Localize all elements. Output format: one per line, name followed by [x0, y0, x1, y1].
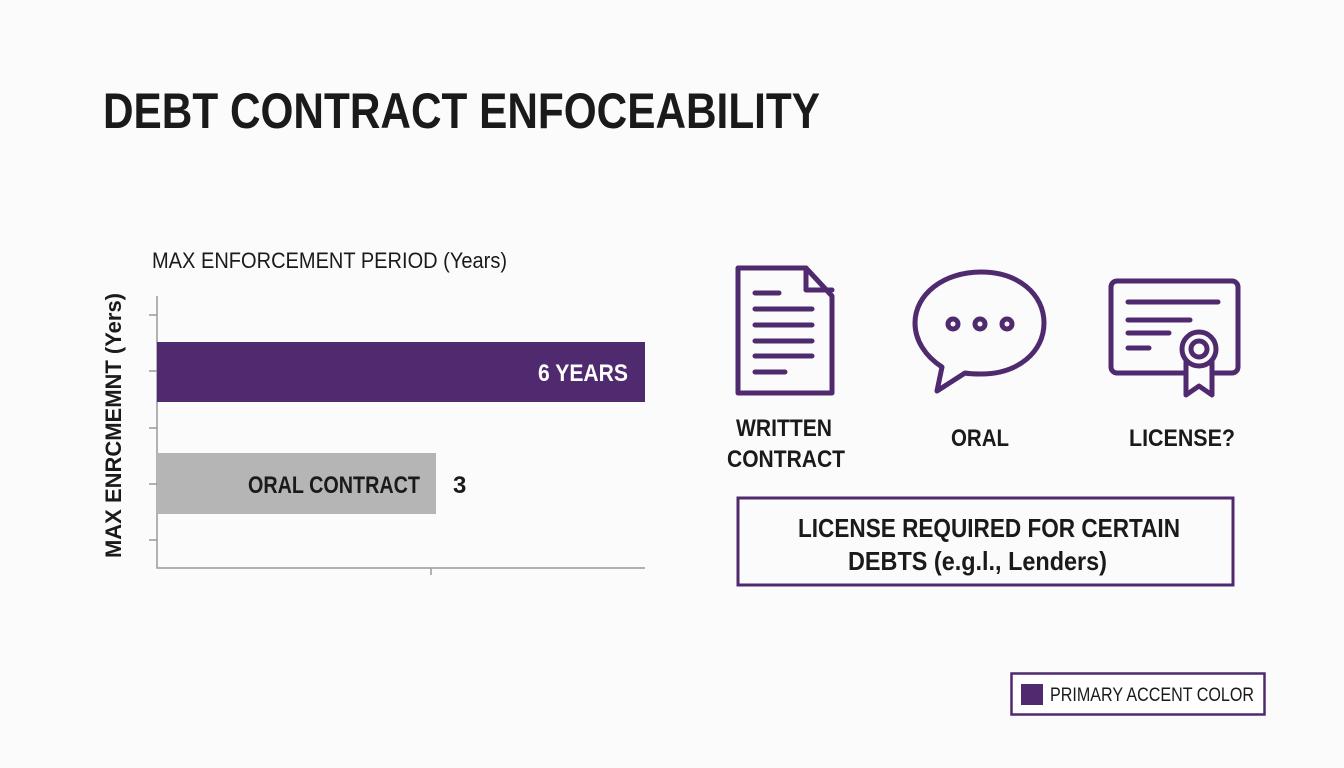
legend: PRIMARY ACCENT COLOR [1050, 685, 1254, 706]
title: DEBT CONTRACT ENFOCEABILITY [103, 83, 820, 139]
chart title: MAX ENFORCEMENT PERIOD (Years) [152, 248, 507, 273]
icon: license certificate [1111, 0, 1238, 395]
bar: oral contract 3: 3 [453, 472, 466, 499]
callout: license requirement: DEBTS (e.g.l., Lenders) [848, 546, 1107, 576]
callout: license requirement: LICENSE REQUIRED FOR CERTAIN [798, 513, 1180, 543]
bar: written contract 6 years: 6 YEARS [538, 360, 628, 387]
chart: max enforcement period [101, 248, 645, 575]
label: oral: ORAL [951, 425, 1009, 452]
y axis label: MAX ENRCMEMNT (Yers) [101, 293, 126, 558]
icon: written document [738, 268, 832, 393]
bar: oral contract 3 [157, 453, 466, 514]
label: written contract: WRITTEN [736, 415, 832, 442]
callout: license requirement [738, 498, 1233, 585]
bar: oral contract 3: ORAL CONTRACT [248, 472, 420, 499]
legend [1012, 674, 1264, 714]
text: CONTRACT [727, 446, 845, 473]
bar: written contract 6 years [157, 342, 645, 402]
label: license: LICENSE? [1129, 425, 1235, 452]
icon: speech bubble [915, 272, 1044, 391]
